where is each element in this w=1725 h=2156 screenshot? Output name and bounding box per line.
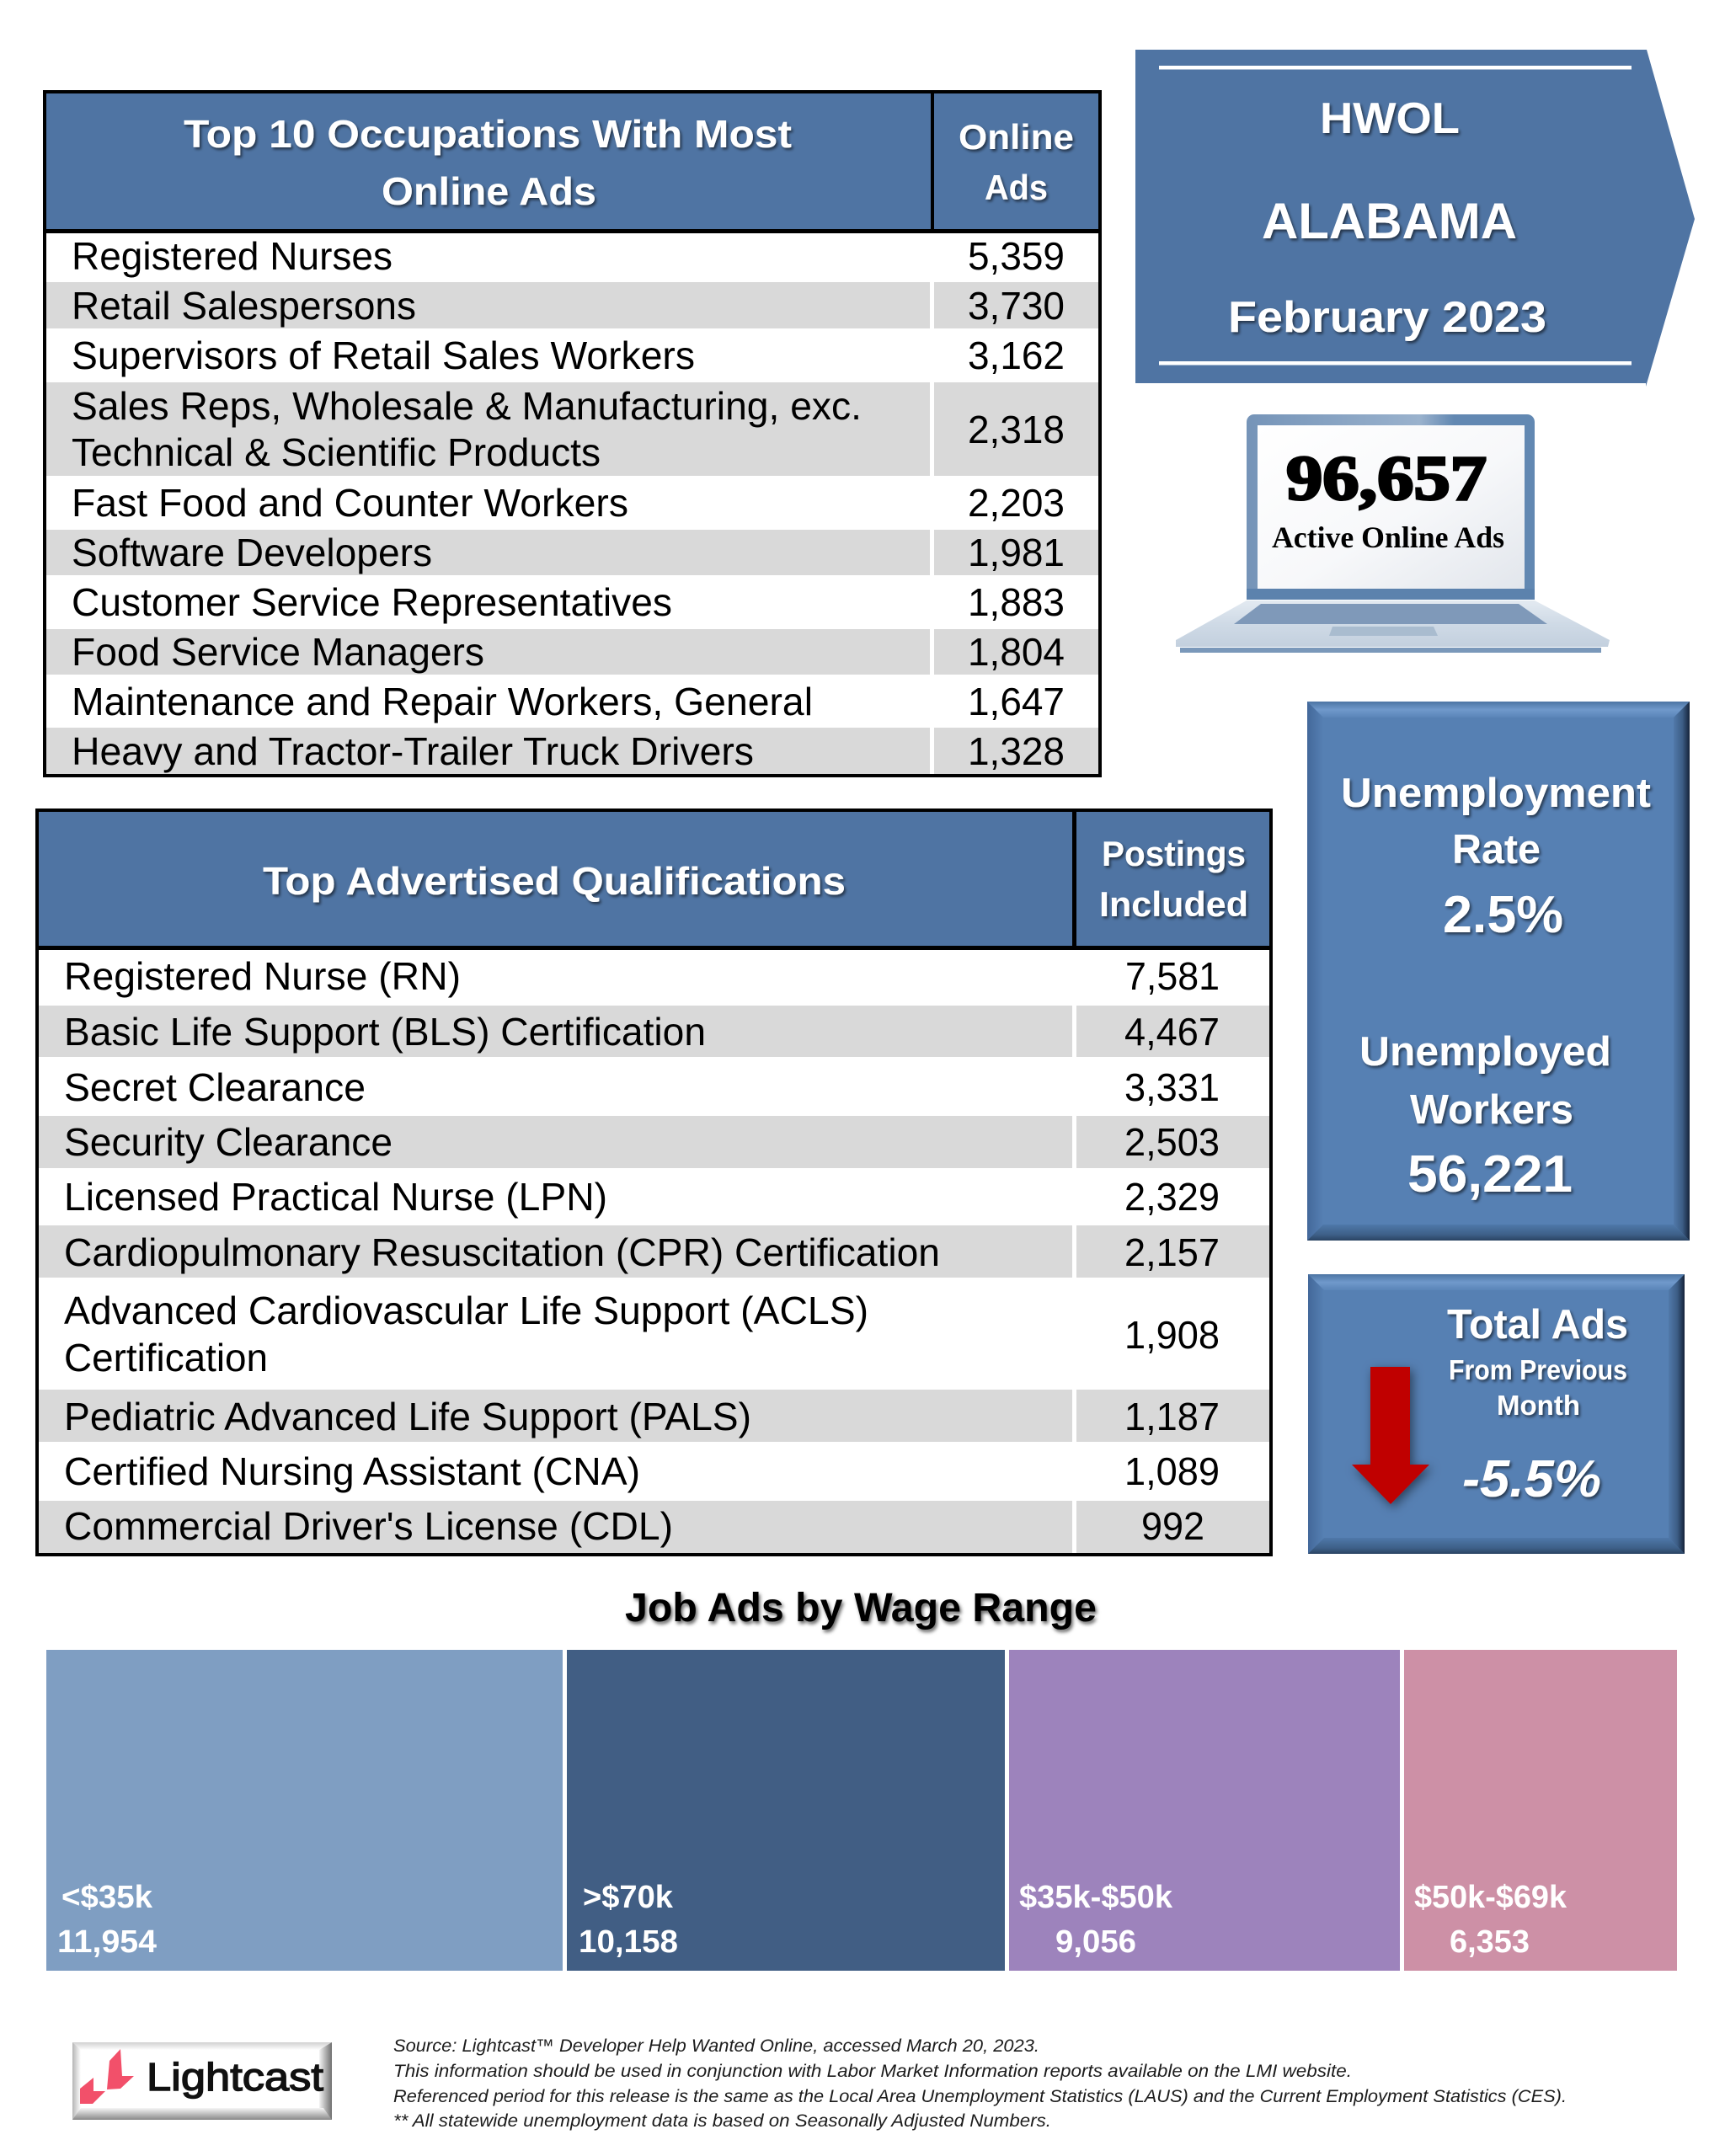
table header: occupations: Top 10 Occupations With Most [184, 112, 792, 156]
row: Security Clearance: Security Clearance [64, 1120, 393, 1164]
row: Sales Reps: Technical & Scientific Products [72, 430, 601, 474]
table header: qualifications: Top Advertised Qualifications [263, 859, 846, 903]
tile: under 35k: 11,954 [57, 1924, 157, 1960]
banner title text: February 2023 [1228, 293, 1546, 342]
row: Licensed Practical Nurse [64, 1175, 1220, 1219]
row: Secret Clearance: 3,331 [1124, 1065, 1220, 1109]
row: Supervisors of Retail Sales Workers [72, 334, 1065, 377]
row: CDL: 992 [1141, 1504, 1204, 1548]
row: Food Service Managers: Food Service Managers [72, 630, 484, 674]
banner title text: ALABAMA [1262, 193, 1517, 249]
panel: top advertised qualifications table [35, 808, 1273, 1556]
icon: red down arrow [1352, 1367, 1429, 1504]
source notes: This information should be used in conjunction with Labor Market Information reports available on the LMI website. [393, 2062, 1352, 2081]
panel: title banner arrow [1135, 50, 1695, 387]
banner title text: HWOL [1320, 94, 1460, 143]
panel: total ads change [1308, 1274, 1685, 1554]
row: Fast Food and Counter Workers: Fast Food and Counter Workers [72, 481, 628, 525]
unemployed workers: 56,221 [1407, 1145, 1573, 1203]
row: CDL: Commercial Driver's License (CDL) [64, 1504, 673, 1548]
row: Registered Nurse: 7,581 [1125, 954, 1220, 998]
row: Sales Reps: 2,318 [968, 408, 1065, 451]
unemployment rate [1341, 771, 1651, 944]
table header: occupations: Online Ads [382, 169, 596, 213]
unemployed workers: Workers [1410, 1087, 1573, 1133]
row: Supervisors of Retail Sales Workers: 3,162 [968, 334, 1065, 377]
table header: qualifications [39, 812, 1269, 950]
row: PALS: 1,187 [1124, 1395, 1220, 1438]
banner title text [1228, 94, 1546, 342]
table header: occupations [46, 93, 1098, 233]
row: Security Clearance [39, 1116, 1269, 1168]
source notes: Referenced period for this release is the same as the Local Area Unemployment Statistics (LAUS) and the Current Employment Statistics (CES). [393, 2087, 1567, 2106]
row: Software Developers: 1,981 [968, 531, 1065, 574]
tile: 35k to 50k: $35k-$50k [1019, 1880, 1173, 1915]
unemployed workers [1359, 1029, 1611, 1203]
panel: top 10 occupations table [43, 90, 1102, 777]
active ads count: 96,657 [1286, 444, 1487, 514]
unemployment rate: Rate [1452, 827, 1541, 873]
source notes: ** All statewide unemployment data is based on Seasonally Adjusted Numbers. [393, 2111, 1051, 2131]
row: Registered Nurse: Registered Nurse (RN) [64, 954, 461, 998]
row: Retail Salespersons: 3,730 [968, 284, 1065, 328]
row: Maintenance and Repair Workers: Maintenance and Repair Workers, General [72, 680, 813, 723]
tile: 35k to 50k [1009, 1650, 1400, 1971]
logo wordmark: Lightcast [147, 2055, 323, 2099]
icon: laptop with active online ads [1176, 414, 1610, 653]
table header: occupations: Ads [985, 168, 1048, 207]
logo: Lightcast [72, 2042, 332, 2120]
row: CDL [39, 1501, 1269, 1553]
row: ACLS: Advanced Cardiovascular Life Support (ACLS) [64, 1289, 868, 1332]
row: Registered Nurses: Registered Nurses [72, 234, 393, 278]
table header: qualifications: Postings [1102, 834, 1246, 873]
tile: under 35k [46, 1650, 563, 1971]
row: Heavy and Tractor-Trailer Truck Drivers: 1,328 [968, 729, 1065, 773]
row: CPR: 2,157 [1124, 1230, 1220, 1274]
row: Maintenance and Repair Workers: 1,647 [968, 680, 1065, 723]
panel: unemployment stats [1307, 702, 1690, 1241]
source notes [393, 2036, 1567, 2131]
row: Supervisors of Retail Sales Workers: Supervisors of Retail Sales Workers [72, 334, 695, 377]
row: Security Clearance: 2,503 [1124, 1120, 1220, 1164]
total ads text: From Previous [1449, 1354, 1627, 1385]
source notes: Source: Lightcast™ Developer Help Wanted Online, accessed March 20, 2023. [393, 2036, 1039, 2056]
total ads text [1447, 1302, 1628, 1508]
tile: 50k to 69k [1404, 1650, 1677, 1971]
row: CPR: Cardiopulmonary Resuscitation (CPR) Certification [64, 1230, 940, 1274]
row: Basic Life Support [39, 1006, 1269, 1057]
tile: 50k to 69k: $50k-$69k [1414, 1880, 1567, 1915]
row: ACLS: 1,908 [1124, 1313, 1220, 1357]
row: Licensed Practical Nurse: 2,329 [1124, 1175, 1220, 1219]
row: Customer Service Representatives: Customer Service Representatives [72, 580, 672, 624]
row: Food Service Managers: 1,804 [968, 630, 1065, 674]
row: PALS: Pediatric Advanced Life Support (PALS) [64, 1395, 751, 1438]
active ads caption: Active Online Ads [1272, 520, 1504, 554]
total ads text: -5.5% [1462, 1450, 1601, 1508]
logo mark [80, 2049, 134, 2104]
table header: qualifications: Included [1099, 884, 1248, 924]
row: Registered Nurses: 5,359 [968, 234, 1065, 278]
row: Secret Clearance: Secret Clearance [64, 1065, 366, 1109]
row: ACLS [64, 1289, 1220, 1380]
row: Basic Life Support: 4,467 [1124, 1010, 1220, 1054]
row: Retail Salespersons: Retail Salespersons [72, 284, 416, 328]
unemployed workers: Unemployed [1359, 1029, 1611, 1075]
row: Retail Salespersons [46, 282, 1098, 328]
row: Sales Reps [46, 382, 1098, 476]
tile: under 35k: <$35k [61, 1880, 153, 1915]
chart: wage range treemap [46, 1650, 1677, 1971]
row: CPR [39, 1225, 1269, 1278]
row: CNA [64, 1449, 1220, 1493]
heading: job ads by wage range: Job Ads by Wage Range [625, 1586, 1097, 1630]
row: Software Developers: Software Developers [72, 531, 432, 574]
unemployment rate: Unemployment [1341, 771, 1651, 816]
row: Food Service Managers [46, 629, 1098, 675]
row: Heavy and Tractor-Trailer Truck Drivers [46, 728, 1098, 774]
row: PALS [39, 1390, 1269, 1442]
row: Sales Reps: Sales Reps, Wholesale & Manufacturing, exc. [72, 384, 862, 428]
table header: occupations: Online [959, 117, 1074, 157]
row: Fast Food and Counter Workers: 2,203 [968, 481, 1065, 525]
tile: over 70k [567, 1650, 1005, 1971]
total ads text: Total Ads [1447, 1302, 1628, 1348]
row: Registered Nurses [72, 234, 1065, 278]
row: ACLS: Certification [64, 1336, 268, 1380]
row: Fast Food and Counter Workers [72, 481, 1065, 525]
row: Registered Nurse [64, 954, 1220, 998]
tile: 35k to 50k: 9,056 [1055, 1924, 1136, 1960]
tile: over 70k: 10,158 [579, 1924, 678, 1960]
tile: 50k to 69k: 6,353 [1450, 1924, 1530, 1960]
row: Customer Service Representatives [72, 580, 1065, 624]
unemployment rate: 2.5% [1443, 886, 1563, 944]
row: Heavy and Tractor-Trailer Truck Drivers: Heavy and Tractor-Trailer Truck Drivers [72, 729, 754, 773]
total ads text: Month [1497, 1390, 1580, 1421]
row: Software Developers [46, 530, 1098, 575]
row: CNA: 1,089 [1124, 1449, 1220, 1493]
row: Basic Life Support: Basic Life Support (BLS) Certification [64, 1010, 706, 1054]
row: Secret Clearance [64, 1065, 1220, 1109]
row: Licensed Practical Nurse: Licensed Practical Nurse (LPN) [64, 1175, 607, 1219]
row: Customer Service Representatives: 1,883 [968, 580, 1065, 624]
tile: over 70k: >$70k [583, 1880, 674, 1915]
row: CNA: Certified Nursing Assistant (CNA) [64, 1449, 640, 1493]
